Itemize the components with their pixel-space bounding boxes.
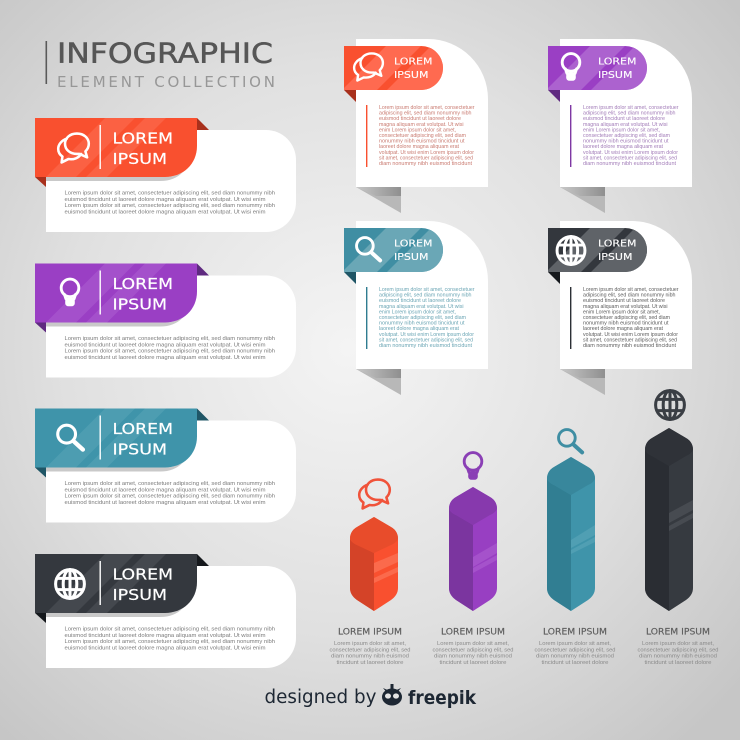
bar caption: purple: consectetuer adipiscing elit, sed	[432, 647, 514, 653]
body text: adipiscing elit, sed diam nonummy nibh	[379, 111, 472, 117]
bar caption: teal: Lorem ipsum dolor sit amet,	[539, 641, 612, 647]
ribbon label: LOREM	[394, 57, 432, 68]
ribbon label: IPSUM	[394, 252, 428, 263]
ribbon label: IPSUM	[394, 70, 428, 81]
ribbon label: LOREM	[598, 239, 636, 250]
panel: teal vertical card	[342, 221, 488, 395]
ribbon	[344, 46, 443, 90]
body text: nonummy nibh euismod tincidunt ut	[379, 139, 465, 145]
body text: Lorem ipsum dolor sit amet, consectetuer	[583, 105, 679, 111]
body text: diam nonummy nibh euismod tincidunt	[379, 161, 472, 167]
panel: red vertical card	[342, 39, 488, 213]
body text: adipiscing elit, sed diam nonummy nibh	[379, 293, 472, 299]
body text	[64, 336, 275, 361]
ribbon label: IPSUM	[112, 296, 167, 314]
body text: euismod tincidunt ut laoreet dolore magna aliquam erat volutpat. Ut wisi enim	[64, 633, 266, 639]
bar caption: dark: LOREM IPSUM	[646, 628, 710, 638]
bar caption: dark: Lorem ipsum dolor sit amet,	[642, 641, 715, 647]
body text	[64, 481, 275, 506]
body text: volutpat. Ut wisi enim Lorem ipsum dolor	[583, 332, 678, 338]
bar caption: purple: LOREM IPSUM	[441, 628, 505, 638]
ribbon label	[394, 239, 432, 263]
body text: diam nonummy nibh euismod tincidunt	[583, 161, 676, 167]
ribbon	[35, 554, 197, 613]
ribbon	[35, 118, 197, 177]
body text: nonummy nibh euismod tincidunt ut	[379, 321, 465, 327]
body text: euismod tincidunt ut laoreet dolore	[583, 298, 665, 304]
body text: consectetuer adipiscing elit, sed diam	[379, 133, 466, 139]
body text: consectetuer adipiscing elit, sed diam	[583, 133, 670, 139]
body text: euismod tincidunt ut laoreet dolore magna aliquam erat volutpat. Ut wisi enim	[64, 197, 266, 203]
body text: adipiscing elit, sed diam nonummy nibh	[583, 111, 676, 117]
bar caption: teal: diam nonummy nibh euismod	[536, 654, 614, 660]
bar caption: purple: Lorem ipsum dolor sit amet,	[437, 641, 510, 647]
body text	[379, 287, 475, 349]
bar caption: purple: tincidunt ut laoreet dolore	[440, 660, 506, 666]
panel: purple horizontal banner	[35, 264, 296, 378]
chart: dark isometric bar	[645, 391, 693, 611]
body text: euismod tincidunt ut laoreet dolore magna aliquam erat volutpat. Ut wisi enim	[64, 645, 266, 651]
icon: globe	[56, 570, 84, 598]
body text: euismod tincidunt ut laoreet dolore magna aliquam erat volutpat. Ut wisi enim	[64, 355, 266, 361]
ribbon label: LOREM	[598, 57, 636, 68]
body text: Lorem ipsum dolor sit amet, consectetuer adipiscing elit, sed diam nonummy nibh	[64, 481, 275, 487]
panel: dark vertical card	[546, 221, 692, 395]
body text: Lorem ipsum dolor sit amet, consectetuer	[379, 287, 475, 293]
body text: volutpat. Ut wisi enim Lorem ipsum dolor	[583, 150, 678, 156]
body text: enim Lorem ipsum dolor sit amet,	[583, 309, 660, 315]
body text: Lorem ipsum dolor sit amet, consectetuer adipiscing elit, sed diam nonummy nibh	[64, 349, 275, 355]
icon: globe	[656, 391, 684, 419]
body text	[583, 287, 679, 349]
body text: euismod tincidunt ut laoreet dolore	[379, 298, 461, 304]
bar caption: dark	[638, 628, 718, 666]
body text: enim Lorem ipsum dolor sit amet,	[583, 127, 660, 133]
body text: nonummy nibh euismod tincidunt ut	[583, 139, 669, 145]
ribbon label: LOREM	[112, 130, 173, 148]
body text: sit amet, consectetuer adipiscing elit, sed	[583, 155, 677, 161]
ribbon label: LOREM	[112, 566, 173, 584]
ribbon label	[598, 239, 636, 263]
chart: teal isometric bar	[547, 430, 595, 611]
body text: enim Lorem ipsum dolor sit amet,	[379, 127, 456, 133]
icon: magnifier	[559, 430, 582, 452]
body text: nonummy nibh euismod tincidunt ut	[583, 321, 669, 327]
icon: light bulb	[61, 279, 79, 306]
icon: speech bubbles	[354, 53, 383, 81]
ribbon label: IPSUM	[112, 150, 167, 168]
body text: magna aliquam erat volutpat. Ut wisi	[583, 122, 668, 128]
body text	[379, 105, 475, 167]
ribbon label: IPSUM	[598, 70, 632, 81]
ribbon	[548, 46, 647, 90]
body text: laoreet dolore magna aliquam erat	[379, 326, 459, 332]
body text: sit amet, consectetuer adipiscing elit, sed	[583, 337, 677, 343]
body text: euismod tincidunt ut laoreet dolore magna aliquam erat volutpat. Ut wisi enim	[64, 500, 266, 506]
body text: volutpat. Ut wisi enim Lorem ipsum dolor	[379, 332, 474, 338]
attribution: designed by freepik: designed by	[264, 687, 377, 708]
attribution: designed by freepik	[264, 684, 476, 709]
body text: euismod tincidunt ut laoreet dolore	[379, 116, 461, 122]
ribbon label: LOREM	[394, 239, 432, 250]
bar caption: red	[330, 628, 410, 666]
body text: Lorem ipsum dolor sit amet, consectetuer adipiscing elit, sed diam nonummy nibh	[64, 639, 275, 645]
body text: euismod tincidunt ut laoreet dolore magna aliquam erat volutpat. Ut wisi enim	[64, 209, 266, 215]
bar caption: purple	[432, 628, 514, 666]
bar caption: red: consectetuer adipiscing elit, sed	[330, 647, 410, 653]
title block	[46, 36, 275, 91]
ribbon label	[112, 130, 173, 168]
body text: consectetuer adipiscing elit, sed diam	[583, 315, 670, 321]
heading: infographic: INFOGRAPHIC	[57, 36, 273, 70]
bar caption: teal: LOREM IPSUM	[543, 628, 607, 638]
icon: freepik mascot	[382, 684, 402, 706]
ribbon	[548, 228, 647, 272]
ribbon label: IPSUM	[112, 586, 167, 604]
body text: sit amet, consectetuer adipiscing elit, sed	[379, 155, 473, 161]
subheading: element collection: ELEMENT COLLECTION	[57, 73, 275, 91]
ribbon label	[112, 420, 173, 458]
body text: laoreet dolore magna aliquam erat	[379, 144, 459, 150]
ribbon label	[112, 566, 173, 604]
chart: purple isometric bar	[449, 453, 497, 611]
body text: Lorem ipsum dolor sit amet, consectetuer adipiscing elit, sed diam nonummy nibh	[64, 494, 275, 500]
body text: diam nonummy nibh euismod tincidunt	[583, 343, 676, 349]
body text: euismod tincidunt ut laoreet dolore magna aliquam erat volutpat. Ut wisi enim	[64, 487, 266, 493]
ribbon label: LOREM	[112, 420, 173, 438]
body text: enim Lorem ipsum dolor sit amet,	[379, 309, 456, 315]
bar caption: teal: consectetuer adipiscing elit, sed	[534, 647, 616, 653]
bar caption: dark: tincidunt ut laoreet dolore	[644, 660, 712, 666]
icon: light bulb	[562, 54, 580, 81]
body text: magna aliquam erat volutpat. Ut wisi	[379, 122, 464, 128]
panel: purple vertical card	[546, 39, 692, 213]
body text: laoreet dolore magna aliquam erat	[583, 326, 663, 332]
body text: consectetuer adipiscing elit, sed diam	[379, 315, 466, 321]
attribution: designed by freepik: freepik	[408, 687, 476, 709]
body text	[64, 627, 275, 651]
icon: light bulb	[464, 453, 482, 480]
ribbon label	[598, 57, 636, 81]
icon: globe	[557, 237, 585, 264]
body text: diam nonummy nibh euismod tincidunt	[379, 343, 472, 349]
ribbon	[344, 228, 443, 272]
icon: speech bubbles	[359, 480, 390, 508]
panel: dark horizontal banner	[35, 554, 296, 668]
body text: Lorem ipsum dolor sit amet, consectetuer adipiscing elit, sed diam nonummy nibh	[64, 627, 275, 633]
ribbon	[35, 408, 197, 468]
body text: Lorem ipsum dolor sit amet, consectetuer	[583, 287, 679, 293]
bar caption: red: LOREM IPSUM	[338, 628, 402, 638]
icon: magnifier	[58, 425, 83, 450]
body text: adipiscing elit, sed diam nonummy nibh	[583, 293, 676, 299]
bar caption: purple: diam nonummy nibh euismod	[434, 654, 512, 660]
body text: Lorem ipsum dolor sit amet, consectetuer adipiscing elit, sed diam nonummy nibh	[64, 336, 275, 342]
body text: Lorem ipsum dolor sit amet, consectetuer adipiscing elit, sed diam nonummy nibh	[64, 191, 275, 197]
body text: laoreet dolore magna aliquam erat	[583, 144, 663, 150]
bar caption: dark: consectetuer adipiscing elit, sed	[638, 647, 718, 653]
ribbon label	[112, 275, 173, 314]
body text: euismod tincidunt ut laoreet dolore magna aliquam erat volutpat. Ut wisi enim	[64, 342, 266, 348]
icon: magnifier	[357, 238, 380, 260]
body text: magna aliquam erat volutpat. Ut wisi	[583, 304, 668, 310]
body text: Lorem ipsum dolor sit amet, consectetuer adipiscing elit, sed diam nonummy nibh	[64, 203, 275, 209]
bar caption: red: tincidunt ut laoreet dolore	[336, 660, 404, 666]
icon: speech bubbles	[58, 134, 89, 162]
bar caption: red: Lorem ipsum dolor sit amet,	[334, 641, 407, 647]
panel: red horizontal banner	[35, 118, 296, 232]
chart: red isometric bar	[350, 480, 398, 611]
ribbon label: LOREM	[112, 275, 173, 293]
bar caption: dark: diam nonummy nibh euismod	[639, 654, 717, 660]
body text	[583, 105, 679, 167]
ribbon label: IPSUM	[112, 440, 167, 458]
ribbon	[35, 264, 197, 322]
ribbon label: IPSUM	[598, 252, 632, 263]
body text: volutpat. Ut wisi enim Lorem ipsum dolor	[379, 150, 474, 156]
body text: magna aliquam erat volutpat. Ut wisi	[379, 304, 464, 310]
body text	[64, 191, 275, 215]
body text: Lorem ipsum dolor sit amet, consectetuer	[379, 105, 475, 111]
body text: sit amet, consectetuer adipiscing elit, sed	[379, 337, 473, 343]
panel: teal horizontal banner	[35, 408, 296, 522]
bar caption: teal	[534, 628, 616, 666]
body text: euismod tincidunt ut laoreet dolore	[583, 116, 665, 122]
bar caption: red: diam nonummy nibh euismod	[331, 654, 409, 660]
bar caption: teal: tincidunt ut laoreet dolore	[542, 660, 608, 666]
ribbon label	[394, 57, 432, 81]
